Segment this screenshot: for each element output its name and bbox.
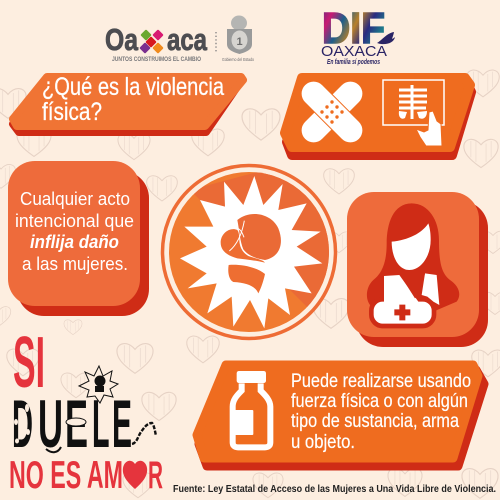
icon: lips: [66, 418, 86, 426]
logo: Oaxaca government: [105, 16, 254, 63]
icon: small punch burst: [79, 366, 118, 403]
panel: bandage and x-ray: [285, 76, 471, 155]
icon: heart as letter O: [123, 461, 147, 489]
logo: DIF Oaxaca: OAXACA: [321, 43, 387, 60]
icon: woman with arm sling: [367, 203, 459, 326]
icon: crossed bandages: [296, 76, 368, 148]
icon: state shield: [227, 16, 252, 54]
text: definition: a las mujeres.: [22, 254, 128, 274]
campaign slogan: R: [148, 454, 163, 497]
panel: definition: [8, 161, 149, 316]
icon: feather: [377, 32, 395, 44]
logo: DIF Oaxaca: En familia sí podemos: [327, 59, 380, 66]
icon: state shield: 1: [236, 36, 243, 48]
icon: U tail: [46, 447, 61, 452]
logo: Oaxaca government: JUNTOS CONSTRUIMOS EL CAMBIO: [112, 56, 201, 63]
icon: D dots: [14, 404, 30, 444]
text: definition: intencional que: [15, 211, 134, 231]
text: means description: u objeto.: [291, 431, 355, 453]
logo: DIF Oaxaca: DIF: [322, 4, 385, 53]
logo: Oaxaca government: aca: [167, 22, 208, 57]
icon: medicine bottle: [233, 371, 270, 447]
panel: means of violence: [197, 365, 484, 466]
text: DUELE: U: [38, 386, 63, 462]
campaign slogan: E: [112, 386, 132, 462]
icon: boxing glove in starburst: [160, 164, 338, 340]
text: DUELE: D: [12, 386, 33, 462]
text: means description: tipo de sustancia, arma: [291, 410, 459, 432]
logo: Oaxaca government: Gobierno del Estado: [222, 57, 254, 62]
panel: question: [13, 73, 243, 132]
icon: x-ray screen with hand: [383, 80, 444, 146]
text: means description: fuerza física o con algún: [291, 390, 468, 412]
heading: question text: ¿Qué es la violencia: [42, 73, 224, 101]
icon: Oaxaca coloured diamonds: [139, 29, 164, 54]
campaign slogan: SI: [13, 323, 45, 403]
campaign slogan: [9, 323, 163, 497]
text: definition: Cualquier acto: [20, 189, 130, 209]
campaign slogan: NO ES AM: [9, 454, 123, 497]
text: DUELE: E: [65, 386, 88, 462]
logo: Oaxaca government: Oa: [105, 22, 139, 57]
panel: nurse: [347, 192, 488, 347]
text: DUELE: L: [92, 386, 109, 462]
icon: broken chain: [132, 423, 156, 444]
text: definition: inflija daño: [30, 232, 119, 252]
heading: question text: física?: [42, 98, 102, 126]
